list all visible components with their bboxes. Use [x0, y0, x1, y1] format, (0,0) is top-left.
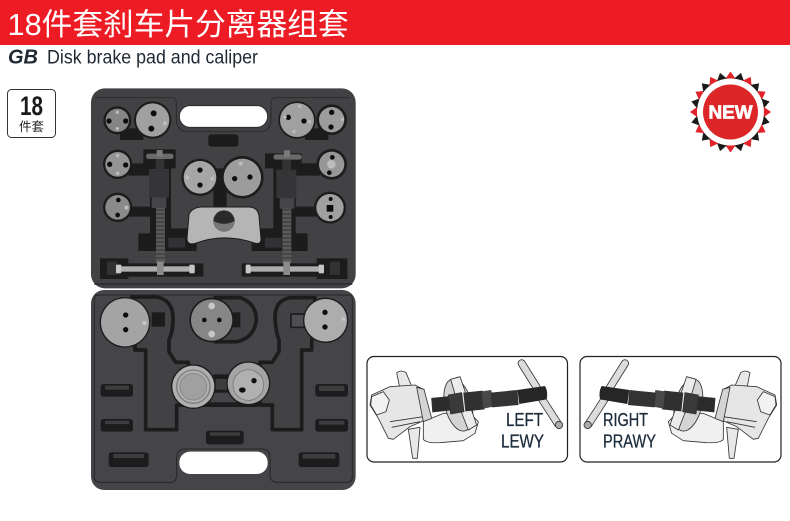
recess pockets [152, 312, 258, 407]
slots [101, 384, 348, 467]
label: left: LEFT [506, 410, 543, 430]
storage slot [208, 134, 238, 147]
pucks row: top [103, 101, 347, 139]
handle cut-out [179, 452, 268, 474]
illustration: right caliper and tool [584, 363, 777, 458]
large puck pins [142, 303, 345, 337]
case photo: top half [91, 88, 356, 288]
label: lewy: LEWY [501, 432, 544, 452]
NEW badge: NEW [708, 102, 753, 122]
large pucks [100, 297, 348, 409]
title banner [0, 0, 790, 45]
NEW badge [690, 71, 771, 153]
panel: right caliper [580, 356, 781, 462]
piece count badge [8, 90, 56, 138]
puck pins [116, 105, 344, 210]
moulded recesses [100, 128, 347, 279]
large puck holes [123, 310, 328, 393]
left wind-back tool [116, 150, 195, 275]
illustration: left caliper and tool [370, 363, 563, 458]
handle cut-out [179, 106, 268, 127]
title banner: 18件套刹车片分离器组套 [8, 7, 349, 42]
label: prawy: PRAWY [603, 432, 656, 452]
pucks row: middle and lower [103, 149, 347, 224]
badge teeth [690, 71, 771, 153]
piece count badge: 件套 [19, 119, 44, 134]
label: right: RIGHT [603, 410, 648, 430]
case photo: bottom half [91, 290, 356, 490]
panel: left caliper [367, 356, 568, 462]
subtitle: GB [8, 46, 38, 68]
tool recesses [132, 297, 315, 430]
puck holes [106, 110, 335, 219]
wind-back plate [187, 207, 261, 244]
subtitle: Disk brake pad and caliper [47, 48, 259, 68]
right wind-back tool [246, 150, 324, 275]
piece count badge: 18 [20, 91, 43, 121]
